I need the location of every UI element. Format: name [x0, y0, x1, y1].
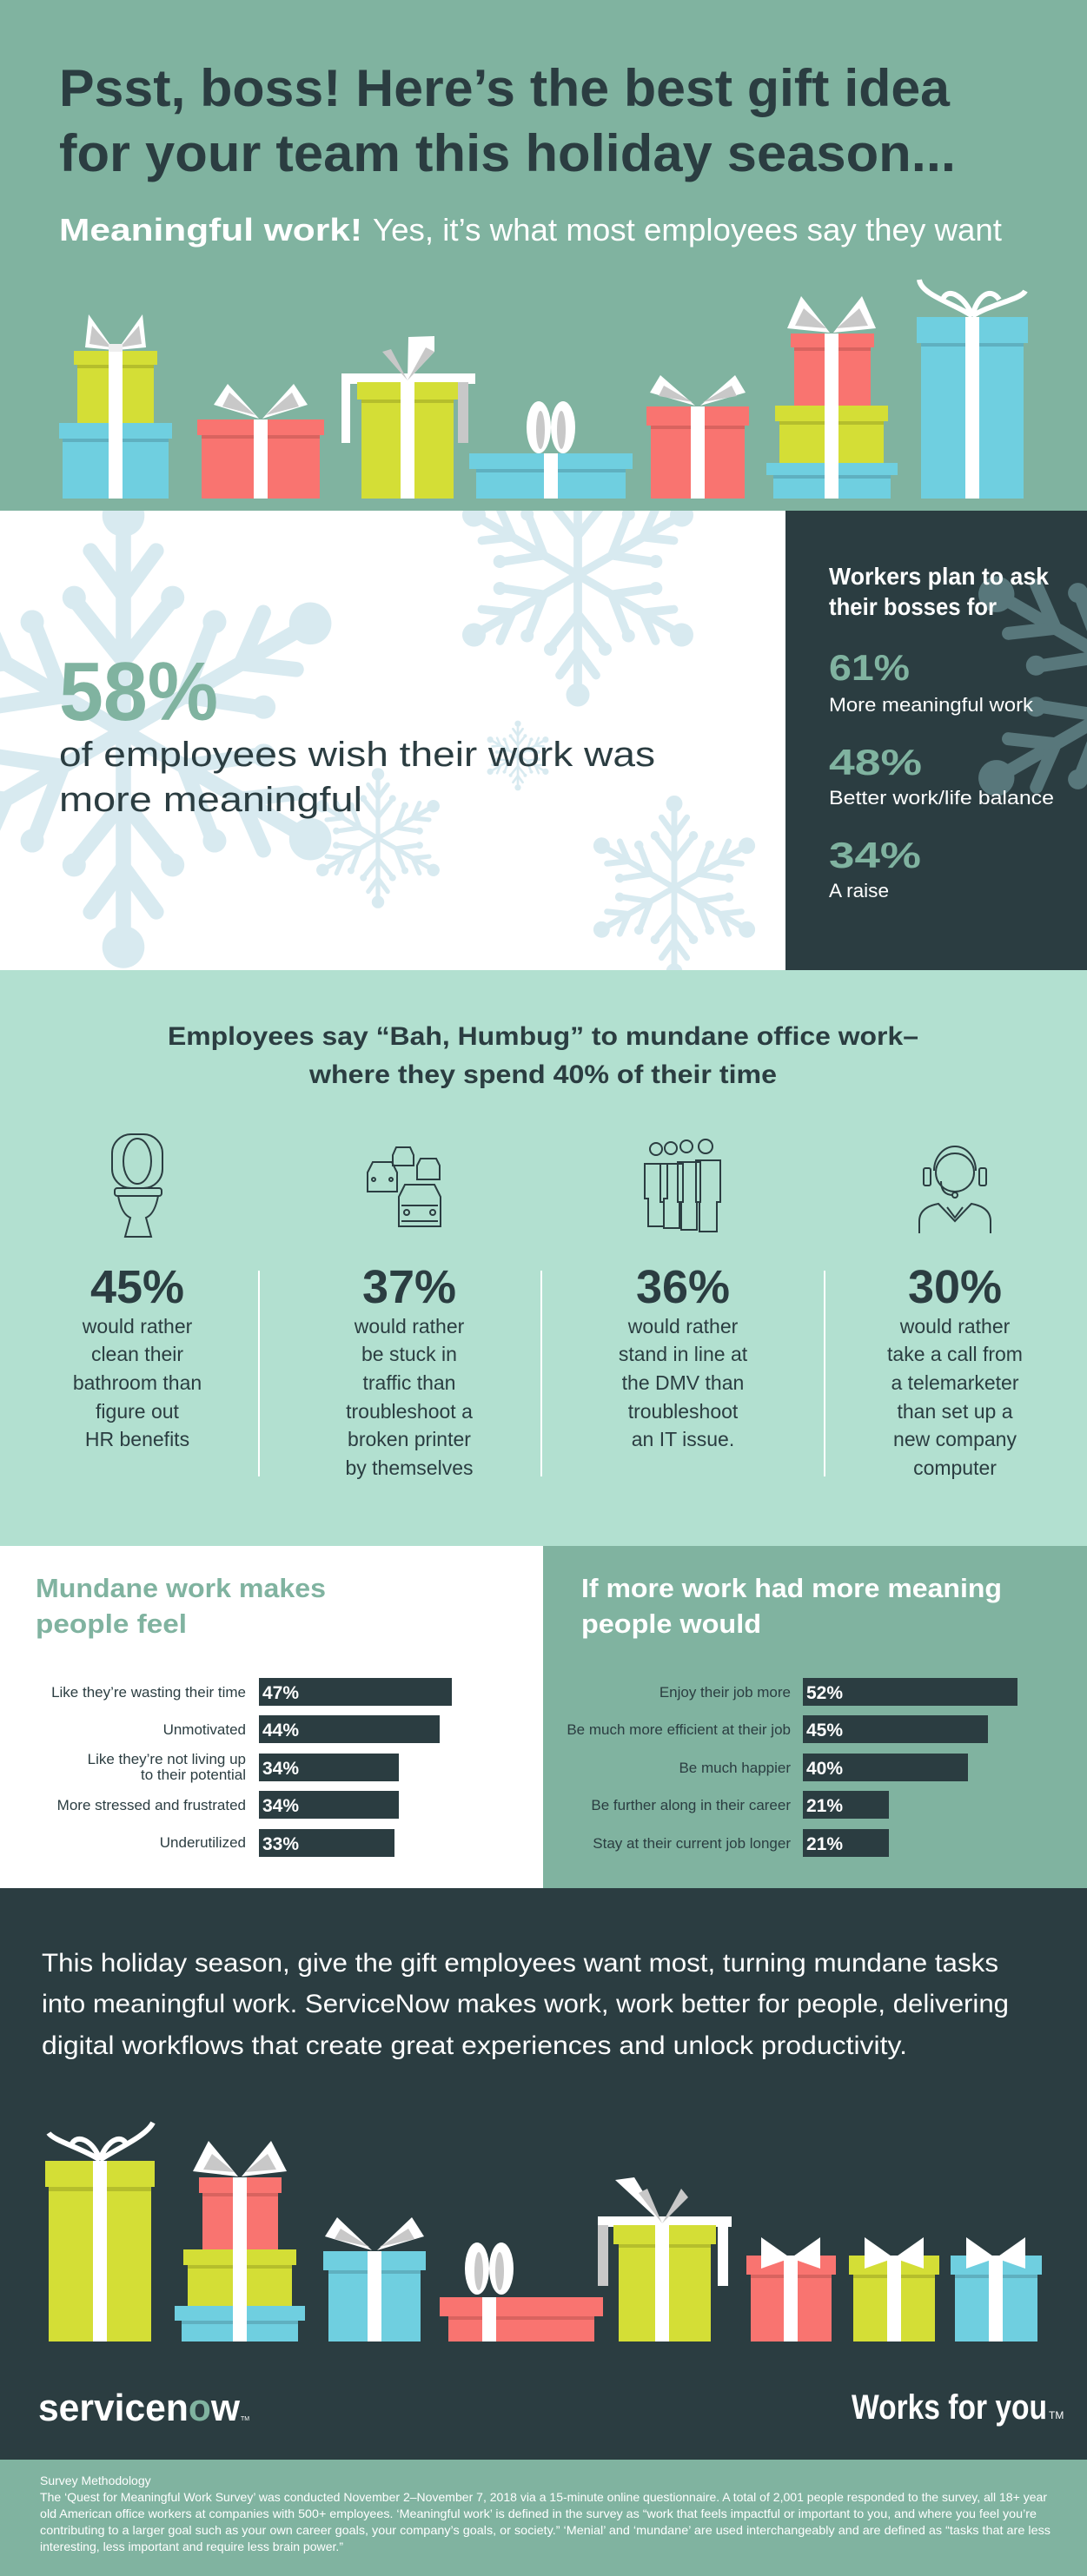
gift 7: [917, 280, 1028, 499]
stat: 37%: would rather: [354, 1315, 465, 1338]
stat: 30%: 30%: [908, 1261, 1002, 1313]
stat: 36%: stand in line at: [619, 1343, 748, 1365]
panel: if more work had meaning: people would: [581, 1608, 761, 1639]
panel: if more work had meaning: If more work had more meaning: [581, 1573, 1002, 1603]
panel: if more work had meaning: [543, 1546, 1087, 1888]
stat 34%: 34%: [829, 835, 921, 875]
stat 34%: [829, 835, 921, 902]
bar chart right: [567, 1678, 1017, 1857]
stat: 37%: [345, 1261, 474, 1479]
footer: survey methodology: old American office workers at companies with 500+ employees. ‘Meaningful work’ is defined in the survey as “work that feels impactful or important to you, and where you feel you’re: [40, 2507, 1037, 2520]
stat 61%: 61%: [829, 647, 910, 688]
bar chart right: Be further along in their career: [591, 1797, 791, 1813]
paragraph: digital workflows that create great experiences and unlock productivity.: [42, 2031, 907, 2060]
stat 48%: [829, 742, 1054, 809]
title: for your team this holiday season...: [59, 124, 956, 182]
tagline: works for you: TM: [1049, 2409, 1064, 2421]
panel: mundane work makes people feel: Mundane work makes: [36, 1573, 326, 1603]
header panel: [0, 0, 1087, 511]
stat: 58%: of employees wish their work was: [59, 736, 655, 774]
icon: traffic: [368, 1147, 441, 1226]
subtitle: Meaningful work!: [59, 212, 362, 248]
bar chart right: 40%: [806, 1759, 843, 1779]
stat: 58%: more meaningful: [59, 781, 362, 819]
stat: 45%: bathroom than: [73, 1371, 202, 1394]
bar chart left: Like they’re not living up: [88, 1751, 246, 1767]
bar chart left: 33%: [262, 1834, 299, 1854]
tagline: works for you: Works for you: [852, 2388, 1047, 2427]
bar chart right: 21%: [806, 1796, 843, 1816]
stat: 37%: traffic than: [363, 1371, 455, 1394]
stat: 45%: [73, 1261, 202, 1450]
stat: 30%: computer: [913, 1456, 997, 1479]
gift 3: [341, 336, 475, 499]
stat: 36%: [619, 1261, 748, 1450]
panel: bah humbug: [0, 970, 1087, 1546]
stat: 37%: be stuck in: [361, 1343, 457, 1365]
stat: 45%: 45%: [90, 1261, 184, 1313]
heading: where they spend 40% of their time: [308, 1060, 777, 1089]
logo: servicenow: servicenow: [38, 2387, 241, 2429]
footer: survey methodology: Survey Methodology: [40, 2474, 151, 2487]
stat: 37%: by themselves: [345, 1456, 474, 1479]
stat: 37%: troubleshoot a: [346, 1400, 473, 1423]
stat: 45%: clean their: [91, 1343, 183, 1365]
heading: [168, 1022, 918, 1089]
bar chart left: 47%: [262, 1683, 299, 1703]
bar chart right: Stay at their current job longer: [593, 1835, 791, 1852]
bar chart right: 45%: [806, 1721, 843, 1740]
paragraph: This holiday season, give the gift employees want most, turning mundane tasks: [42, 1949, 998, 1978]
footer: survey methodology: The ‘Quest for Meaningful Work Survey’ was conducted November 2–November 7, 2018 via a 15-minute online questionnaire. A total of 2,001 people responded to the survey, all 18+ year: [40, 2490, 1047, 2504]
heading: Employees say “Bah, Humbug” to mundane office work–: [168, 1022, 918, 1051]
panel: mundane work makes people feel: [0, 1546, 543, 1888]
stat: 58%: [59, 645, 655, 819]
stat 61%: [829, 647, 1034, 716]
stat 34%: A raise: [829, 880, 889, 902]
stat: 36%: troubleshoot: [628, 1400, 739, 1423]
icon: queue: [645, 1139, 720, 1232]
bar chart left: Like they’re wasting their time: [51, 1684, 246, 1701]
title: Psst, boss! Here’s the best gift idea: [59, 59, 951, 117]
gift 2: [197, 384, 324, 499]
stat: 45%: would rather: [82, 1315, 193, 1338]
subtitle: [59, 212, 1002, 248]
stat: 36%: would rather: [627, 1315, 739, 1338]
footer: survey methodology: [0, 2460, 1087, 2576]
paragraph: [42, 1949, 1009, 2060]
stat 48%: Better work/life balance: [829, 787, 1054, 809]
decorative snowflakes: [0, 443, 766, 980]
bar chart left: 34%: [262, 1796, 299, 1816]
stat: 30%: new company: [893, 1428, 1017, 1450]
stat: 58%: 58%: [59, 645, 218, 738]
bar chart right: Be much happier: [679, 1760, 791, 1776]
footer: survey methodology: interesting, less important and require less brain power.”: [40, 2540, 343, 2553]
bar chart left: to their potential: [141, 1767, 246, 1783]
gift 6 stack: [766, 296, 898, 499]
bar chart left: Underutilized: [160, 1834, 246, 1851]
panel: workers plan to ask: their bosses for: [829, 593, 997, 620]
stat: 37%: 37%: [362, 1261, 456, 1313]
title: [59, 59, 956, 182]
logo: servicenow: TM: [241, 2416, 249, 2422]
bar chart left: 34%: [262, 1759, 299, 1779]
footer: survey methodology: contributing to a larger goal such as your own career goals, your company’s goals, or society.” ‘Menial’ and ‘mundane’ are used interchangeably and are defined as “tasks that are less: [40, 2523, 1051, 2537]
gifts: header row: [59, 280, 1028, 499]
gift 1 stack: [59, 314, 172, 499]
bar chart right: Be much more efficient at their job: [567, 1721, 791, 1738]
stat: 30%: [887, 1261, 1023, 1479]
stat: 30%: a telemarketer: [891, 1371, 1019, 1394]
icon: toilet: [112, 1134, 162, 1237]
stat: 36%: 36%: [636, 1261, 730, 1313]
panel: workers plan to ask: Workers plan to ask: [829, 563, 1049, 590]
stat: 45%: figure out: [96, 1400, 180, 1423]
stat: 30%: take a call from: [887, 1343, 1023, 1365]
stat: 30%: would rather: [899, 1315, 1011, 1338]
panel: mundane work makes people feel: people feel: [36, 1608, 187, 1639]
bar chart right: 21%: [806, 1834, 843, 1854]
gift 5: [646, 375, 749, 499]
bar chart left: [51, 1678, 452, 1857]
stat: 30%: than set up a: [897, 1400, 1013, 1423]
bar chart left: More stressed and frustrated: [57, 1797, 246, 1813]
bar chart right: Enjoy their job more: [659, 1684, 791, 1701]
panel: closing message: [0, 1888, 1087, 2460]
gift 4: [469, 401, 633, 499]
subtitle: Yes, it’s what most employees say they want: [373, 212, 1002, 248]
gifts: bottom row: [45, 2123, 1042, 2342]
panel: 58% snowflake section: [0, 511, 755, 970]
stat 48%: 48%: [829, 742, 922, 783]
paragraph: into meaningful work. ServiceNow makes work, work better for people, delivering: [42, 1990, 1009, 2018]
stat: 36%: an IT issue.: [632, 1428, 734, 1450]
bar chart left: 44%: [262, 1721, 299, 1740]
stat: 45%: HR benefits: [85, 1428, 189, 1450]
stat: 37%: broken printer: [348, 1428, 471, 1450]
bar chart right: 52%: [806, 1683, 843, 1703]
stat: 36%: the DMV than: [622, 1371, 744, 1394]
panel: workers plan to ask: [785, 485, 1087, 970]
bar chart left: Unmotivated: [163, 1721, 246, 1738]
stat 61%: More meaningful work: [829, 694, 1034, 716]
icon: headset: [919, 1146, 991, 1233]
